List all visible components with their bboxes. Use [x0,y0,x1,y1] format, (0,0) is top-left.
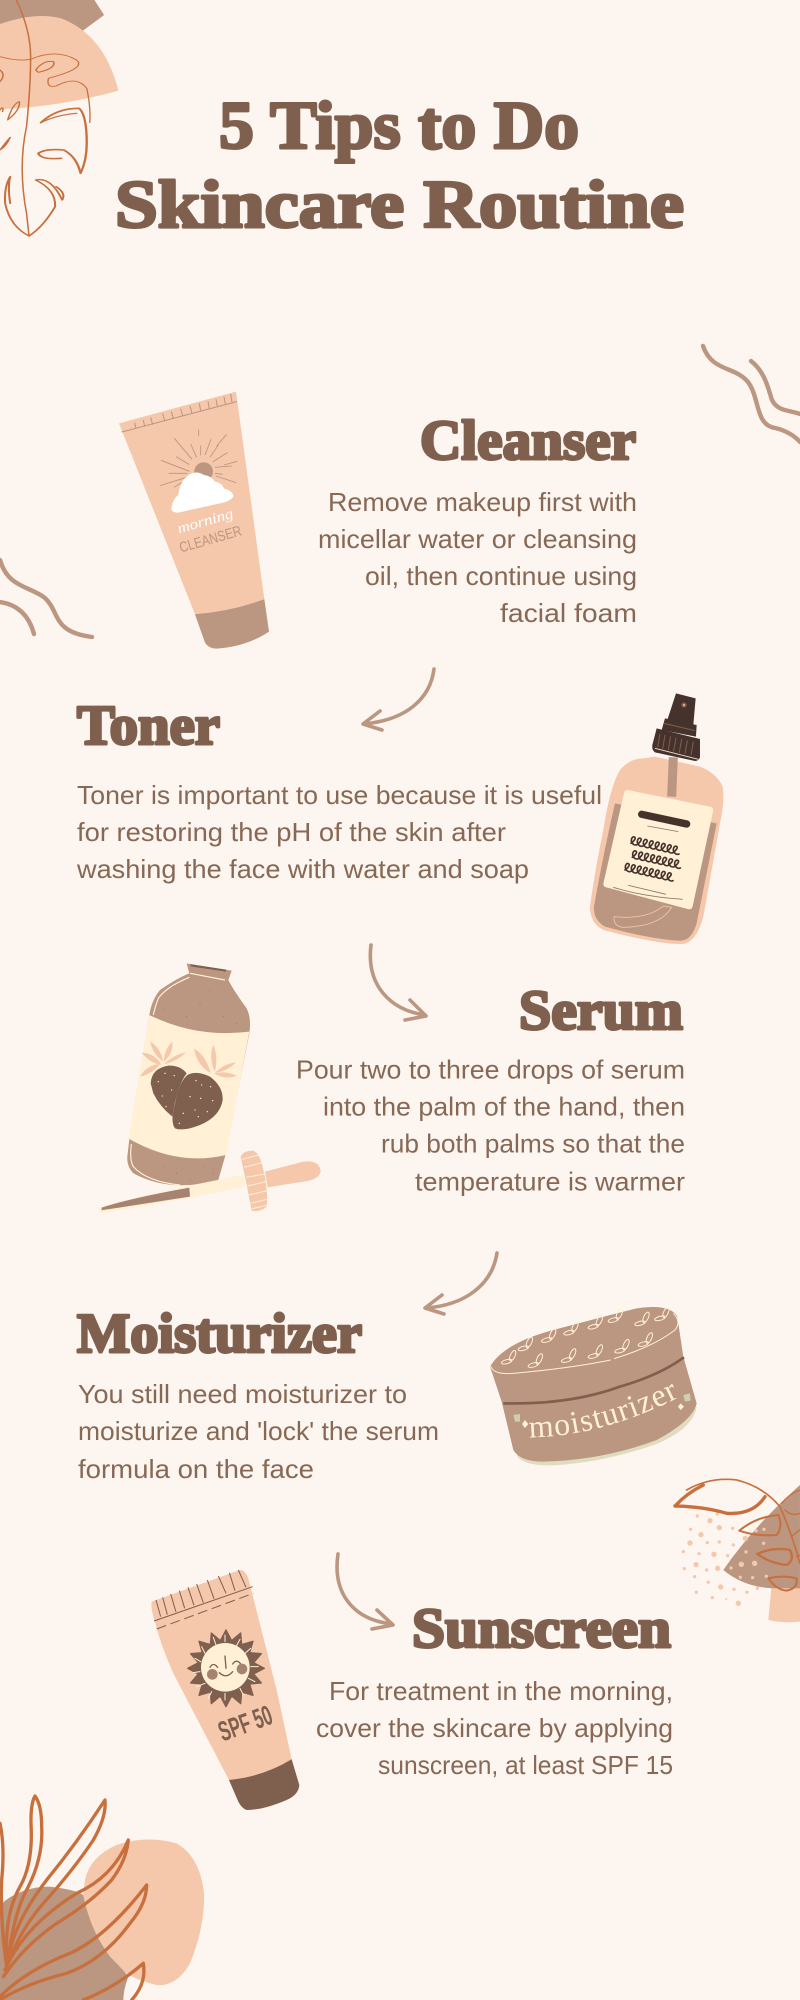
label text: SPF 50: SPF 50 [214,1699,276,1747]
title [115,87,684,242]
text: Toner tip: Toner is important to use because it is useful [77,780,602,810]
text: Cleanser tip: Remove makeup first with [328,487,637,517]
text: Serum tip: into the palm of the hand, then [323,1092,685,1122]
text: Sunscreen tip [316,1676,673,1780]
strawberry leaves [140,1042,237,1077]
arrow: serum to moisturizer [425,1253,497,1314]
label text: morning: morning [176,506,235,537]
label text: moisturizer: moisturizer [529,1384,676,1438]
text: Moisturizer tip: moisturize and 'lock' the serum [78,1416,439,1446]
strawberry [151,1066,187,1117]
decoration: bottom-left leaves and blobs [0,1796,204,2000]
text: Cleanser tip: micellar water or cleansing [318,524,637,554]
arrow: cleanser to toner [363,669,434,730]
text: Sunscreen tip: sunscreen, at least SPF 15 [378,1750,673,1780]
heading: Cleanser: Cleanser [420,410,636,472]
heading: Serum: Serum [519,980,683,1042]
icon: moisturizer jar [490,1306,697,1466]
text: Serum tip: rub both palms so that the [381,1128,685,1158]
heading: Sunscreen: Sunscreen [412,1598,671,1660]
text: Cleanser tip: oil, then continue using [365,561,637,591]
text: Toner tip: for restoring the pH of the skin after [77,817,506,847]
text: Serum tip: temperature is warmer [415,1166,685,1196]
title: 5 Tips to Do [219,87,579,163]
dropper [98,1175,245,1213]
icon: serum bottle and dropper [98,963,321,1213]
text: Sunscreen tip: For treatment in the morning, [329,1676,673,1706]
text: Cleanser tip [318,487,637,628]
decoration: right-side plant and dots [675,1479,800,1622]
decoration: top-right squiggles [703,346,800,442]
sun emblem [188,1630,264,1707]
text: Sunscreen tip: cover the skincare by applying [316,1713,673,1743]
label text: CLEANSER: CLEANSER [178,523,244,556]
icon: sunscreen tube [151,1570,299,1810]
decoration: top-left monstera leaf and shapes [0,0,118,236]
arrow: moisturizer to sunscreen [337,1554,393,1629]
text: Toner tip [76,780,602,884]
text: Moisturizer tip [78,1379,439,1484]
icon: toner spray bottle [590,693,723,944]
icon: cleanser tube [119,392,269,649]
title: Skincare Routine [115,166,684,242]
arrow: toner to serum [370,945,426,1020]
text: Moisturizer tip: formula on the face [78,1454,314,1484]
heading: Moisturizer: Moisturizer [77,1303,362,1365]
text: Toner tip: washing the face with water and soap [76,854,529,884]
text: Serum tip: Pour two to three drops of serum [296,1054,685,1084]
heading: Toner: Toner [77,695,220,757]
text: Cleanser tip: facial foam [500,598,637,628]
text: Moisturizer tip: You still need moisturizer to [78,1379,407,1409]
text: Serum tip [296,1054,685,1196]
decoration: left squiggles [0,560,92,637]
